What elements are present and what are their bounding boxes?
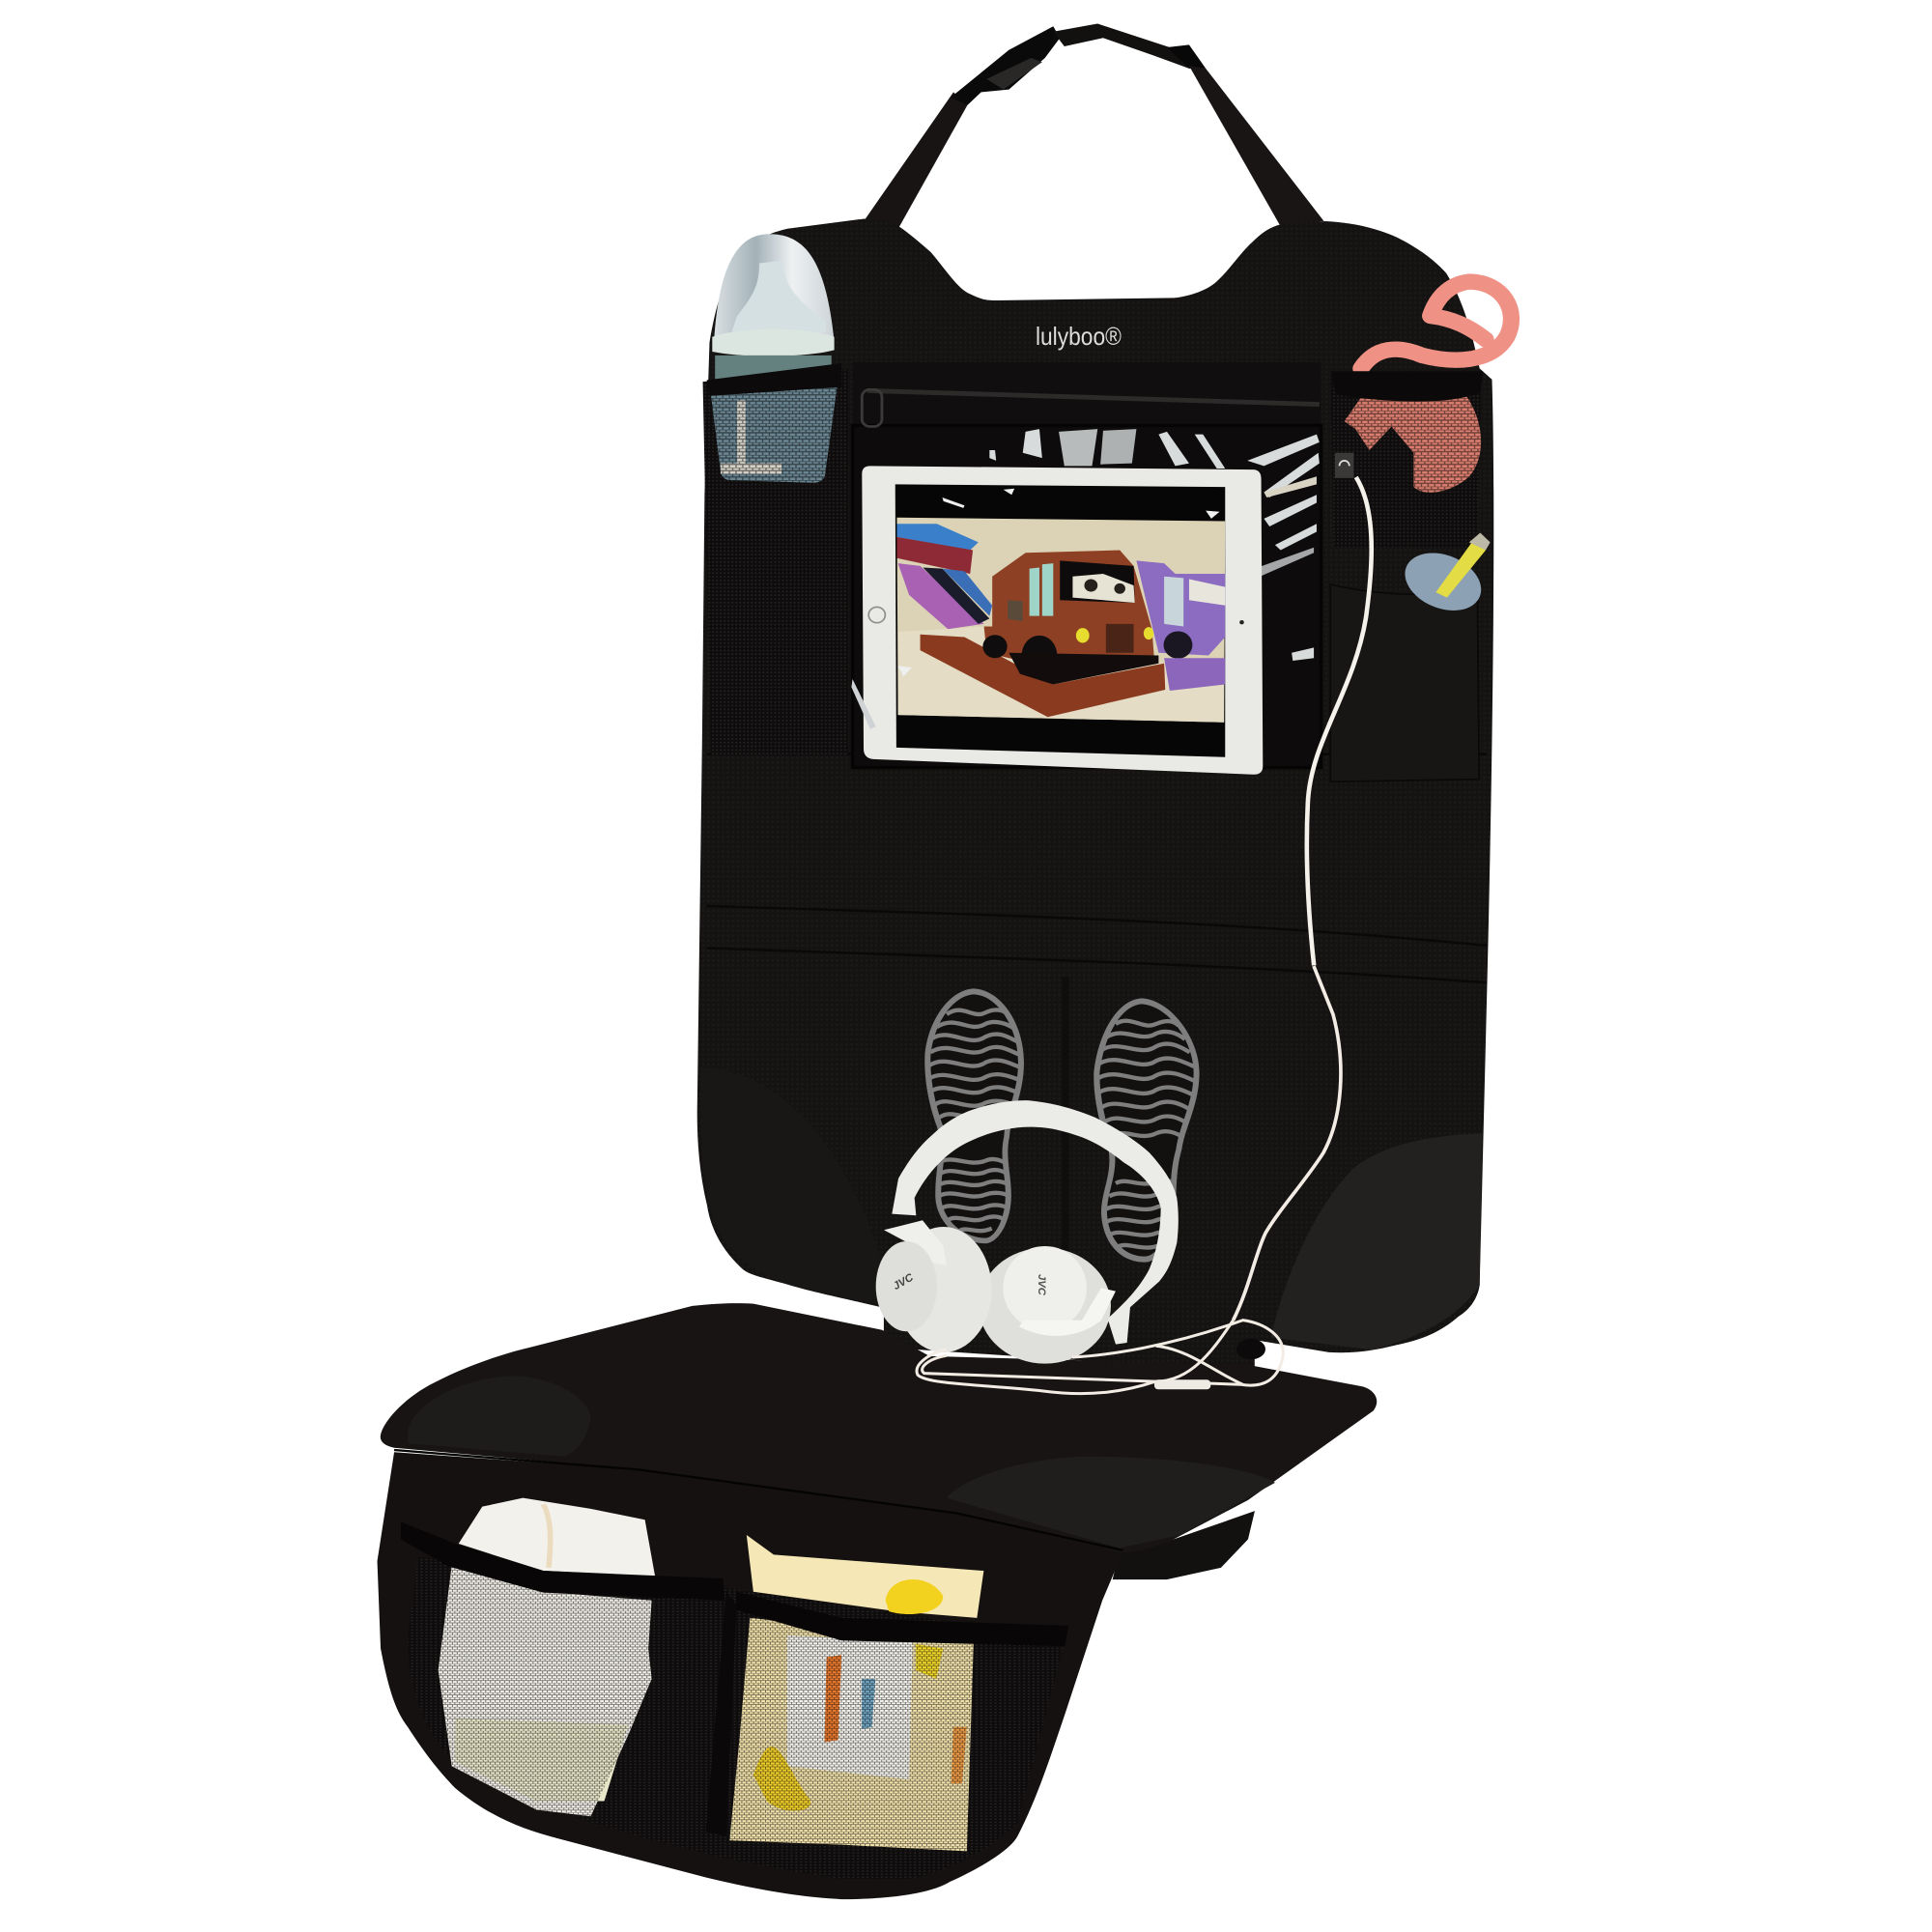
mesh net (711, 387, 837, 483)
under tray (1113, 1511, 1255, 1579)
home button (868, 607, 885, 623)
pocket divider (706, 1592, 736, 1836)
tablet screen (895, 484, 1225, 757)
flamingo teether (1330, 282, 1511, 493)
pocket elastic (1330, 371, 1483, 402)
JVC label: JVC (892, 1271, 916, 1293)
seat front seam (394, 1450, 1122, 1550)
brick ramp (921, 635, 1165, 717)
JVC label: JVC (1036, 1274, 1047, 1296)
leather patches (700, 1066, 1482, 1350)
right ear cup (979, 1246, 1116, 1364)
brown bus (984, 551, 1154, 668)
diaper (439, 1498, 655, 1816)
hanging strap with buckle (862, 24, 1323, 229)
seat surface (381, 1303, 1377, 1552)
diaper top (459, 1498, 655, 1577)
mesh holder contents (711, 387, 837, 483)
tablet in clear pocket (851, 466, 1263, 775)
pocket band right (736, 1592, 1068, 1646)
headphone port tag (1264, 453, 1353, 497)
teether upper loop (1361, 282, 1511, 369)
teat (731, 261, 826, 331)
back panel organiser (697, 24, 1493, 1372)
pacifier (1395, 533, 1491, 622)
clear window (853, 425, 1321, 768)
top details in pocket area (703, 362, 1481, 781)
front pocket flap (378, 1452, 1122, 1899)
wipes top (747, 1535, 983, 1618)
panel fabric body (697, 218, 1493, 1372)
zipper pocket (853, 362, 1321, 425)
zipper pull (862, 389, 882, 426)
bottle in mesh holder (707, 234, 841, 483)
reflections on tablet (851, 489, 1220, 729)
video picture (896, 518, 1225, 723)
inline remote (1154, 1379, 1210, 1389)
audio jack (1264, 476, 1317, 497)
holder band (707, 363, 841, 396)
right fabric pocket (1330, 584, 1479, 781)
seat leather patches (408, 1376, 590, 1457)
headband (892, 1100, 1179, 1345)
seat cushion pad (378, 1303, 1377, 1899)
pacifier shield (1395, 542, 1491, 622)
wipes pack (729, 1535, 983, 1851)
left ear cup (876, 1220, 992, 1352)
teether in mesh (1345, 392, 1481, 493)
slides (896, 524, 979, 551)
bottle cap (714, 234, 835, 342)
headphone cable loops (917, 966, 1341, 1394)
purple bus (1136, 560, 1225, 656)
right mesh pocket (1330, 371, 1481, 548)
bottle body (715, 355, 832, 379)
cable grommet (1236, 1339, 1265, 1359)
brand logo: lulyboo® (1036, 323, 1122, 351)
tablet frame (862, 466, 1263, 775)
pacifier stem (1435, 542, 1486, 598)
panel seams (707, 754, 1487, 1322)
pocket band left (401, 1521, 724, 1601)
glare on clear window (989, 429, 1320, 661)
wipes in net (729, 1618, 974, 1851)
left mesh pocket (703, 369, 848, 755)
zipper (867, 390, 1320, 405)
cable: tablet to headphones (1307, 477, 1372, 965)
diaper in net (439, 1566, 652, 1816)
purple tray (1164, 658, 1225, 691)
feet graphic (924, 988, 1200, 1263)
headphones (876, 966, 1341, 1394)
right foot print (1094, 998, 1200, 1263)
left foot print (924, 988, 1024, 1243)
pocket mesh (408, 1557, 1065, 1879)
bottle ring (712, 329, 835, 356)
camera dot (1239, 620, 1244, 624)
